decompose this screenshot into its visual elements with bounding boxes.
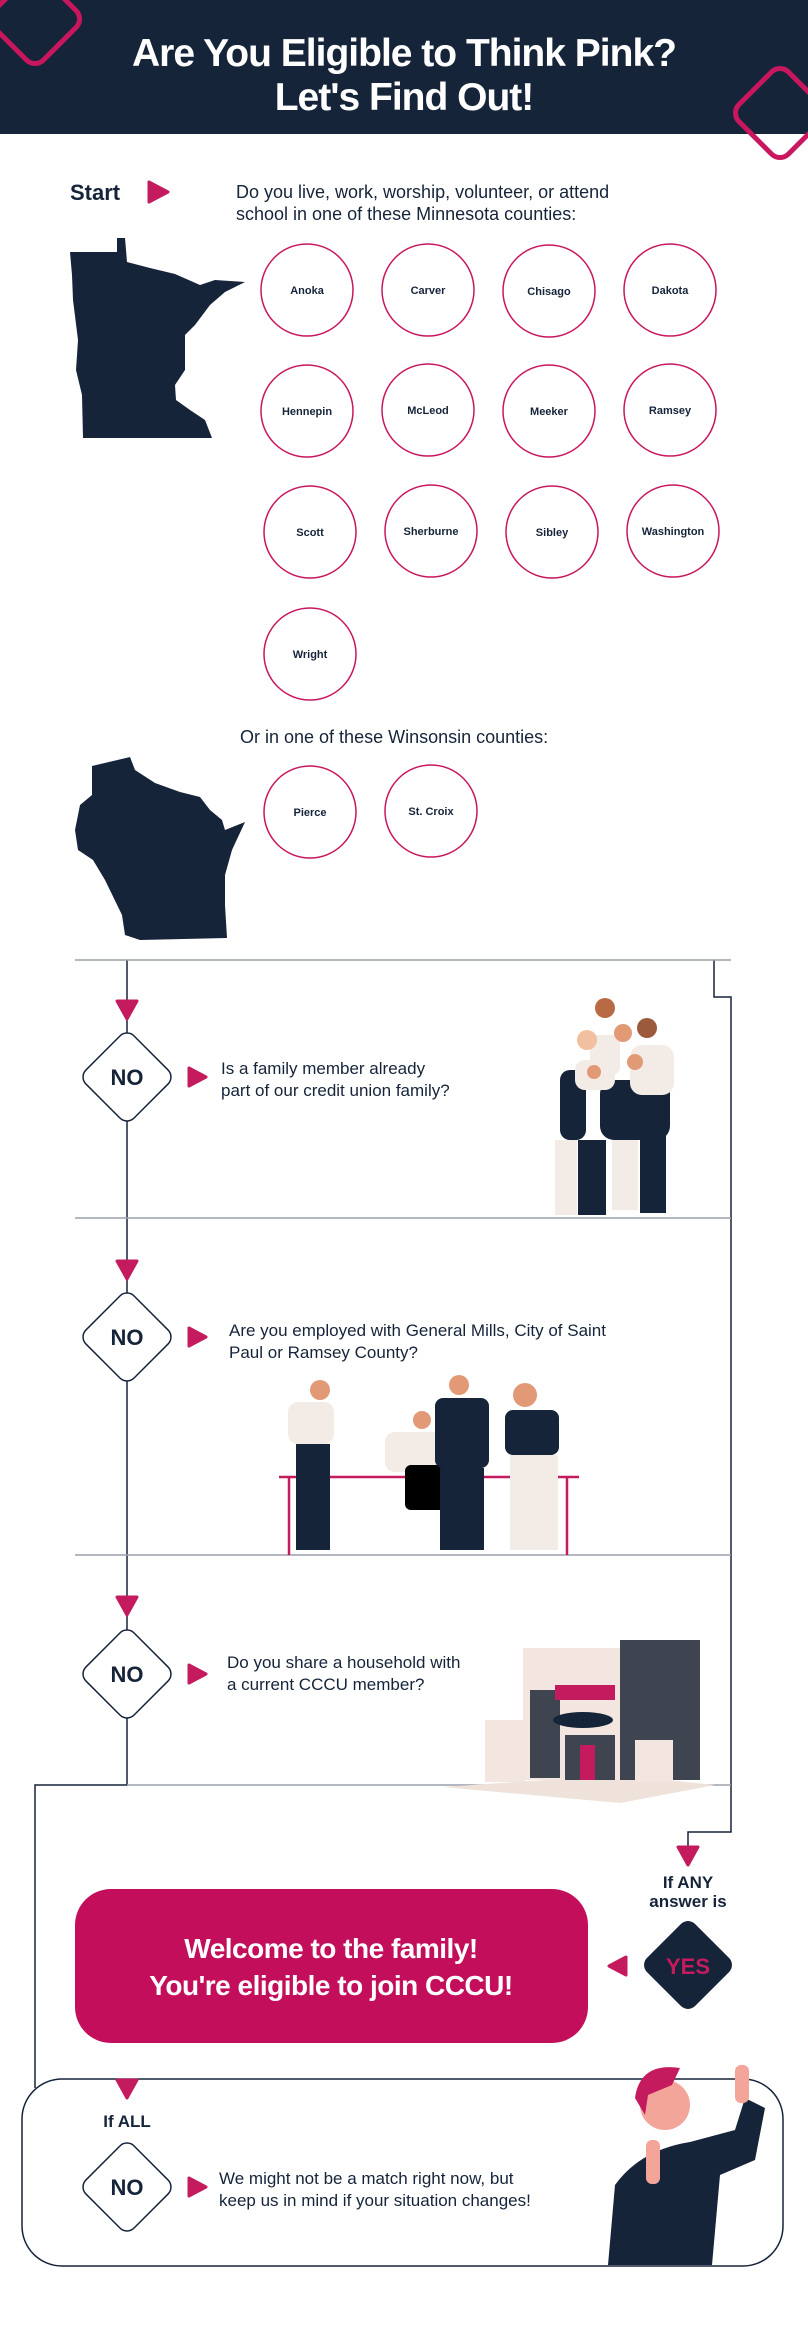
Minnesota county circles: Ramsey <box>649 405 692 417</box>
illustration: office team <box>279 1375 579 1555</box>
NO diamond <box>79 1289 175 1385</box>
bottom panel: all no: We might not be a match right now, but <box>219 2169 514 2188</box>
step 1: family member <box>79 1001 450 1125</box>
welcome callout: You're eligible to join CCCU! <box>149 1970 513 2001</box>
arrow left <box>609 1957 626 1975</box>
Minnesota county circles: Sherburne <box>403 526 459 538</box>
NO diamond <box>79 1626 175 1722</box>
start label <box>70 180 168 205</box>
NO diamond: NO <box>110 1325 144 1350</box>
header banner <box>0 0 808 162</box>
decorative diamond top-left <box>0 0 84 68</box>
Minnesota county circles: Wright <box>293 649 328 661</box>
Minnesota county circles: Carver <box>411 285 446 297</box>
question 1 text <box>236 182 609 224</box>
question 1 text: Do you live, work, worship, volunteer, or attend <box>236 182 609 202</box>
Minnesota county circles: Scott <box>296 527 324 539</box>
step 2: employer <box>79 1261 606 1385</box>
NO diamond: NO <box>110 1065 144 1090</box>
YES branch label: If ANY <box>663 1873 714 1892</box>
YES branch label <box>649 1847 727 1911</box>
illustration: thumbs-up man <box>608 2065 765 2265</box>
welcome callout <box>75 1889 588 2043</box>
Wisconsin county circles <box>264 765 477 858</box>
step 1: family member: Is a family member already <box>221 1059 426 1078</box>
header banner: Let's Find Out! <box>275 76 533 119</box>
Minnesota county circles: Sibley <box>536 527 569 539</box>
title: Are You Eligible to Think Pink? <box>132 32 676 75</box>
Wisconsin question text: Or in one of these Winsonsin counties: <box>240 727 548 747</box>
Minnesota county circles <box>261 244 719 700</box>
icon: Minnesota map <box>70 238 245 438</box>
step 2: employer: Paul or Ramsey County? <box>229 1343 418 1362</box>
step 1: family member: part of our credit union family? <box>221 1081 450 1100</box>
step 3: household: Do you share a household with <box>227 1653 460 1672</box>
YES diamond <box>640 1917 736 2013</box>
start label: Start <box>70 180 121 205</box>
Wisconsin county circles: Pierce <box>293 807 327 819</box>
step 3: household <box>79 1597 460 1722</box>
NO diamond: NO <box>110 2175 144 2200</box>
step 2: employer: Are you employed with General Mills, City of Saint <box>229 1321 606 1340</box>
icon: Wisconsin map <box>75 757 245 940</box>
step 3: household: a current CCCU member? <box>227 1675 424 1694</box>
YES diamond: YES <box>666 1954 710 1979</box>
decorative diamond right <box>731 64 808 162</box>
flow lines <box>35 960 731 2088</box>
Minnesota county circles: McLeod <box>407 405 449 417</box>
Minnesota county circles: Chisago <box>527 286 571 298</box>
illustration: family hug <box>555 998 674 1215</box>
NO diamond: NO <box>110 1662 144 1687</box>
NO diamond <box>79 2139 175 2235</box>
YES branch label: answer is <box>649 1892 727 1911</box>
welcome callout: Welcome to the family! <box>184 1933 478 1964</box>
bottom panel: all no: If ALL <box>103 2112 151 2131</box>
Minnesota county circles: Dakota <box>652 285 689 297</box>
illustration: building <box>442 1640 715 1803</box>
NO diamond <box>79 1029 175 1125</box>
bottom panel: all no: keep us in mind if your situation changes! <box>219 2191 531 2210</box>
Minnesota county circles: Hennepin <box>282 406 332 418</box>
Minnesota county circles: Washington <box>642 526 705 538</box>
Minnesota county circles: Anoka <box>290 285 325 297</box>
Minnesota county circles: Meeker <box>530 406 569 418</box>
Wisconsin county circles: St. Croix <box>408 806 454 818</box>
bottom panel: all no <box>22 2079 783 2266</box>
question 1 text: school in one of these Minnesota counties: <box>236 204 576 224</box>
